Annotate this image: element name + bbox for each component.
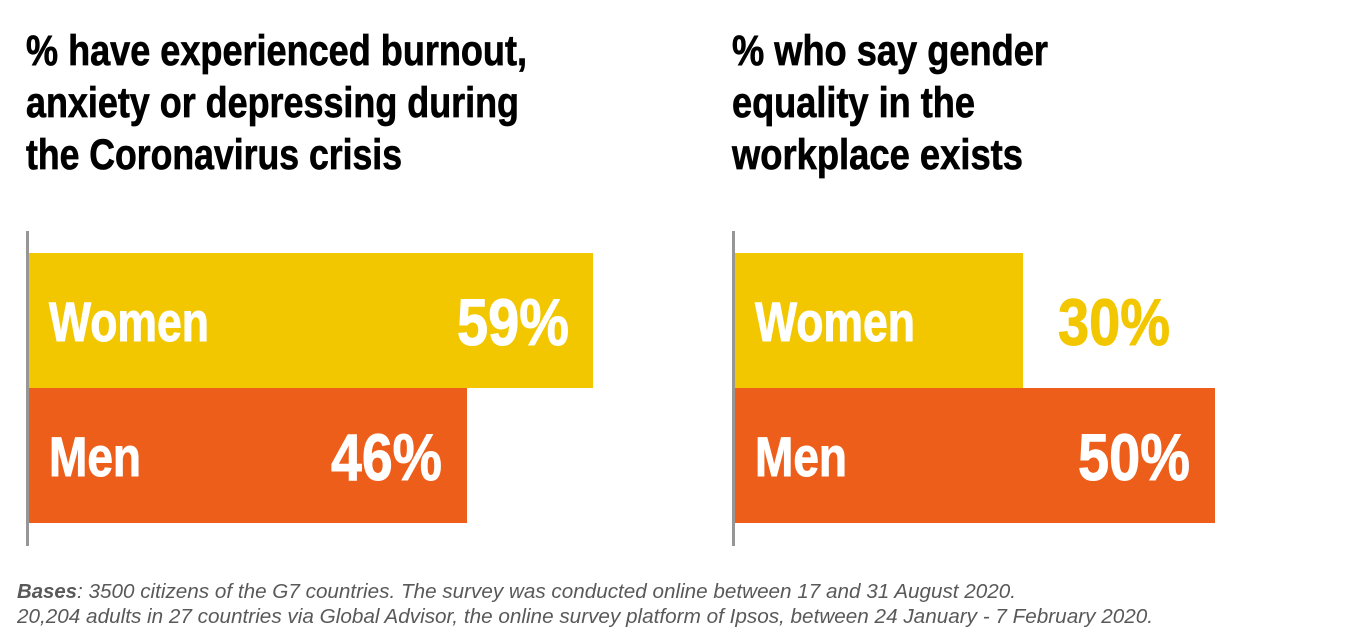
heading: burnout: anxiety or depressing during <box>26 79 519 127</box>
bar: women 59% <box>29 253 593 388</box>
panel: gender equality <box>731 27 1215 546</box>
bar chart: gender equality <box>732 231 1215 546</box>
axis: gender equality <box>732 231 735 546</box>
bar: women 30%: Women <box>755 290 915 353</box>
panel: burnout <box>26 27 593 546</box>
heading: gender equality <box>731 27 1048 179</box>
heading: burnout: the Coronavirus crisis <box>26 131 402 179</box>
bar: men 46%: Men <box>49 425 141 488</box>
bar: men 46% <box>29 388 467 523</box>
bar: women 59%: 59% <box>457 285 569 359</box>
heading: gender equality: workplace exists <box>731 131 1023 179</box>
bar: men 50%: 50% <box>1078 420 1190 494</box>
heading: gender equality: % who say gender <box>732 27 1048 75</box>
heading: burnout <box>26 27 527 179</box>
bar: men 50%: Men <box>755 425 847 488</box>
axis: burnout <box>26 231 29 546</box>
heading: gender equality: equality in the <box>732 79 975 127</box>
footnote: : 3500 citizens of the G7 countries. The survey was conducted online between 17 and 31 August 2020. <box>77 581 1016 603</box>
bar: women 59%: Women <box>49 290 209 353</box>
footnote: 20,204 adults in 27 countries via Global Advisor, the online survey platform of Ipsos, between 24 January - 7 February 2020. <box>16 606 1153 628</box>
bar: men 50% <box>735 388 1215 523</box>
bar: women 30%: 30% <box>1058 285 1170 359</box>
bar: men 46%: 46% <box>331 420 442 494</box>
bar: women 30% <box>735 253 1170 388</box>
bar chart: burnout <box>26 231 593 546</box>
footnote: Bases <box>17 581 77 603</box>
heading: burnout: % have experienced burnout, <box>26 27 527 75</box>
footnote <box>16 581 1153 628</box>
